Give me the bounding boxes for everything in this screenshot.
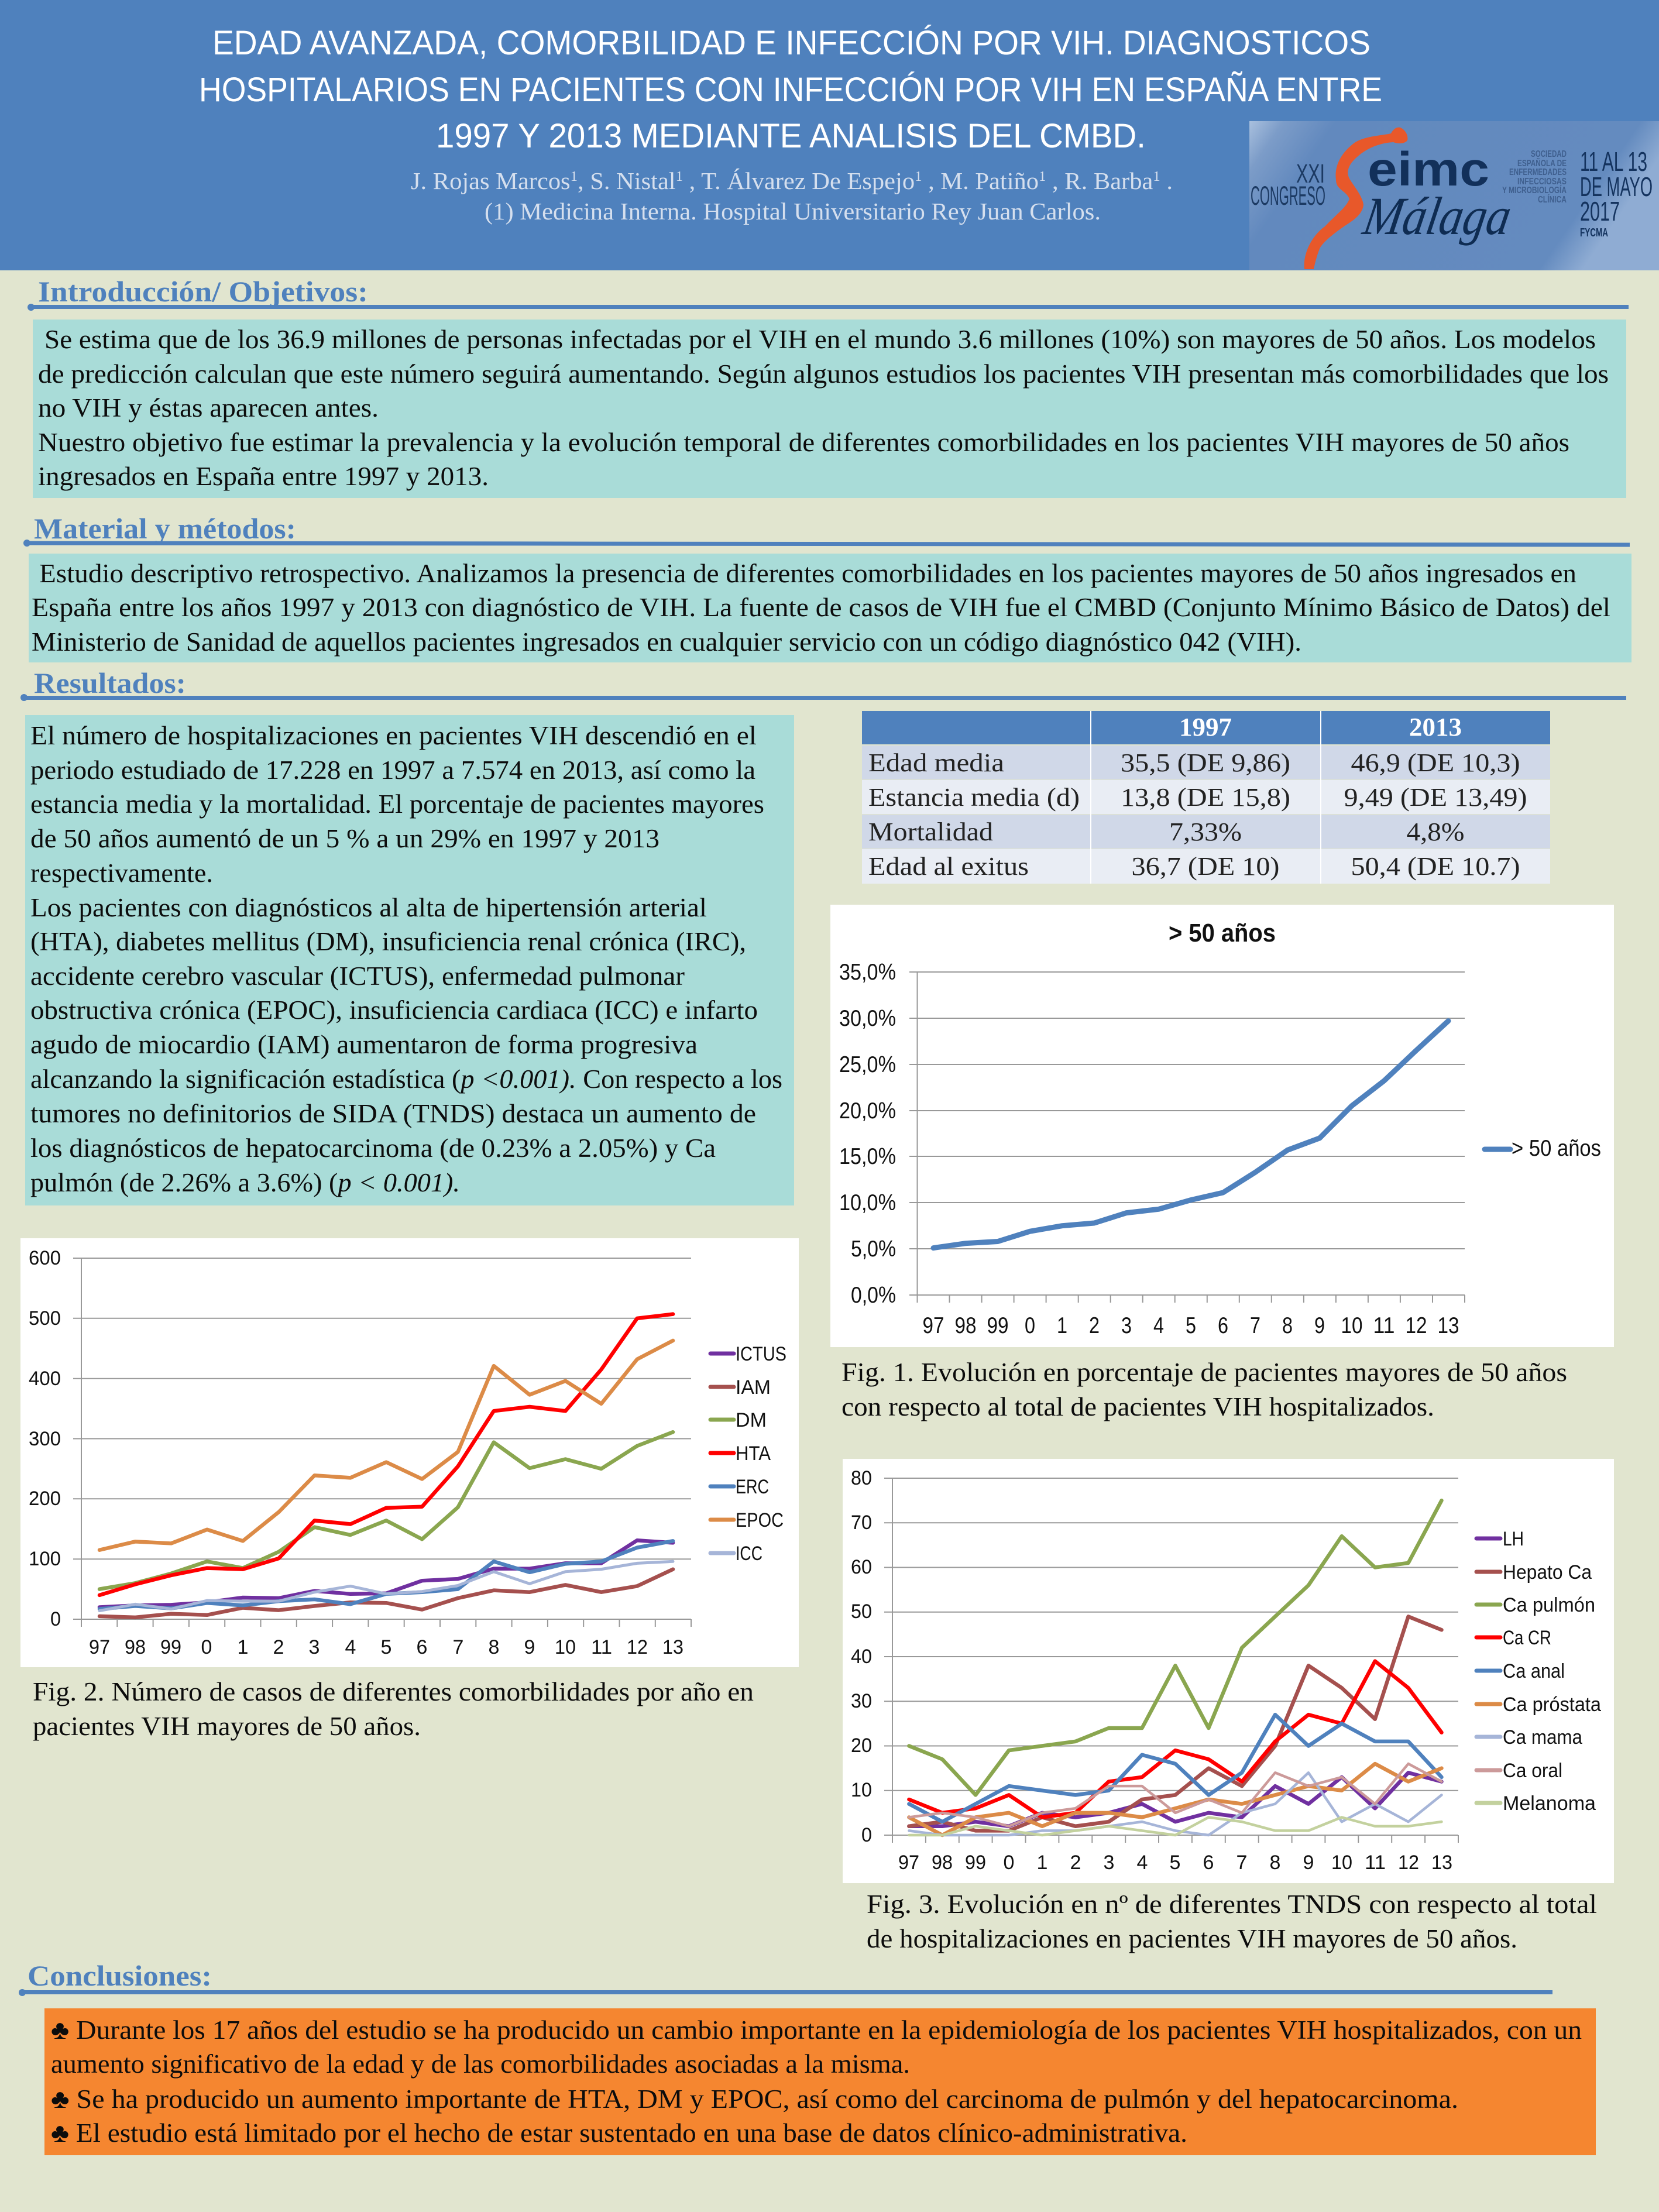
heading: Conclusiones: Conclusiones: xyxy=(28,1959,212,1992)
authors and affiliation: , R. Barba xyxy=(1046,167,1153,194)
chart: Fig. 3 TNDS: 20 xyxy=(851,1734,872,1757)
chart: Fig. 2 comorbilidades: 3 xyxy=(309,1636,320,1658)
caption: Fig. 1: con respecto al total de pacientes VIH hospitalizados. xyxy=(841,1392,1434,1421)
chart: Fig. 3 TNDS: 10 xyxy=(851,1779,872,1801)
title: HOSPITALARIOS EN PACIENTES CON INFECCIÓN POR VIH EN ESPAÑA ENTRE xyxy=(199,71,1382,109)
authors and affiliation: 1 xyxy=(1039,169,1046,184)
caption: Fig. 2: Fig. 2. Número de casos de diferentes comorbilidades por año en xyxy=(33,1677,754,1706)
congress logo: Málaga xyxy=(1358,187,1516,246)
chart: Fig. 1 > 50 años: 98 xyxy=(955,1313,976,1338)
chart: Fig. 2 comorbilidades: 200 xyxy=(29,1488,61,1510)
chart: Fig. 1 > 50 años: 0,0% xyxy=(851,1283,896,1308)
chart: Fig. 1 > 50 años: 97 xyxy=(922,1313,944,1338)
chart: Fig. 2 comorbilidades: 10 xyxy=(555,1636,576,1658)
congress logo: INFECCIOSAS xyxy=(1517,177,1567,187)
congress logo: ENFERMEDADES xyxy=(1509,167,1567,177)
chart: Fig. 1 > 50 años: 5 xyxy=(1186,1313,1196,1338)
congress logo: Y MICROBIOLOGÍA xyxy=(1502,184,1567,195)
authors and affiliation: , M. Patiño xyxy=(922,167,1039,194)
chart: Fig. 3 TNDS: 3 xyxy=(1104,1852,1114,1874)
chart: Fig. 1 > 50 años: 2 xyxy=(1089,1313,1100,1338)
table: summary 1997 vs 2013: Estancia media (d) xyxy=(868,783,1080,812)
congress logo: CONGRESO xyxy=(1251,181,1325,211)
authors and affiliation: 1 xyxy=(676,169,683,184)
panel: conclusiones: ♣ Se ha producido un aumento importante de HTA, DM y EPOC, así como del carcinoma de pulmón y del hepatocarcinoma. xyxy=(51,2084,1458,2114)
congress logo: XXI xyxy=(1296,159,1325,188)
table: summary 1997 vs 2013: 4,8% xyxy=(1407,818,1464,846)
chart: Fig. 3 TNDS: 4 xyxy=(1137,1852,1148,1874)
chart: Fig. 3 TNDS: 2 xyxy=(1070,1852,1081,1874)
panel: resultados text xyxy=(25,715,794,1205)
panel: introducción: de predicción calculan que este número seguirá aumentando. Según algunos estudios los pacientes VIH presentan más comorbilidades que los xyxy=(38,359,1609,389)
chart: Fig. 2 comorbilidades: 400 xyxy=(29,1368,61,1390)
chart: Fig. 3 TNDS: 12 xyxy=(1398,1852,1419,1874)
chart: Fig. 1 > 50 años: 13 xyxy=(1437,1313,1459,1338)
chart: Fig. 1 > 50 años: 4 xyxy=(1153,1313,1164,1338)
panel: resultados text: El número de hospitalizaciones en pacientes VIH descendió en el xyxy=(30,721,757,750)
chart: Fig. 3 TNDS: 30 xyxy=(851,1690,872,1712)
panel: conclusiones: aumento significativo de la edad y de las comorbilidades asociadas a la misma. xyxy=(51,2049,910,2079)
panel: introducción: Nuestro objetivo fue estimar la prevalencia y la evolución temporal de diferentes comorbilidades en los pacientes VIH mayores de 50 años xyxy=(38,428,1569,457)
chart: Fig. 1 > 50 años: 8 xyxy=(1282,1313,1293,1338)
table: summary 1997 vs 2013: 7,33% xyxy=(1169,818,1242,846)
chart: Fig. 3 TNDS: 7 xyxy=(1236,1852,1247,1874)
chart: Fig. 3 TNDS: 50 xyxy=(851,1600,872,1623)
chart: Fig. 2 comorbilidades: 0 xyxy=(50,1608,61,1630)
chart: Fig. 2 comorbilidades: 12 xyxy=(627,1636,648,1658)
congress logo: ESPAÑOLA DE xyxy=(1517,157,1567,169)
congress logo xyxy=(1249,121,1659,270)
chart: Fig. 1 > 50 años: 25,0% xyxy=(839,1052,896,1077)
authors and affiliation: 1 xyxy=(571,169,578,184)
chart: Fig. 3 TNDS: 11 xyxy=(1365,1852,1386,1874)
panel: introducción xyxy=(33,320,1626,498)
congress logo: FYCMA xyxy=(1580,226,1608,239)
authors and affiliation: . xyxy=(1160,167,1173,194)
icon: orange swoosh xyxy=(1304,128,1407,269)
table: summary 1997 vs 2013: Edad al exitus xyxy=(868,852,1029,881)
panel: introducción: no VIH y éstas aparecen antes. xyxy=(38,393,379,423)
chart: Fig. 1 > 50 años: > 50 años xyxy=(1512,1136,1601,1161)
chart: Fig. 1 > 50 años: 5,0% xyxy=(851,1236,896,1262)
table: summary 1997 vs 2013: 9,49 (DE 13,49) xyxy=(1344,783,1527,812)
panel: resultados text: tumores no definitorios de SIDA (TNDS) destaca un aumento de xyxy=(30,1099,756,1128)
panel: resultados text: periodo estudiado de 17.228 en 1997 a 7.574 en 2013, así como la xyxy=(30,755,755,785)
header banner xyxy=(0,0,1659,270)
legend: Fig. 3: Ca pulmón xyxy=(1503,1594,1595,1616)
panel: resultados text: estancia media y la mortalidad. El porcentaje de pacientes mayores xyxy=(30,789,764,819)
caption: Fig. 1 xyxy=(841,1358,1567,1421)
panel: material y métodos xyxy=(29,554,1631,662)
chart: Fig. 2 comorbilidades: 99 xyxy=(160,1636,181,1658)
chart: Fig. 2 comorbilidades: 1 xyxy=(238,1636,248,1658)
congress logo: 2017 xyxy=(1580,196,1620,226)
table: summary 1997 vs 2013: Edad media xyxy=(868,748,1004,777)
chart: Fig. 2 comorbilidades: 500 xyxy=(29,1307,61,1330)
congress logo: CLÍNICA xyxy=(1538,194,1567,205)
authors and affiliation: , T. Álvarez De Espejo xyxy=(683,167,915,194)
caption: Fig. 3: Fig. 3. Evolución en nº de diferentes TNDS con respecto al total xyxy=(867,1890,1597,1919)
legend: Fig. 3: Ca mama xyxy=(1503,1726,1582,1749)
panel: resultados text: accidente cerebro vascular (ICTUS), enfermedad pulmonar xyxy=(30,961,685,991)
authors and affiliation: 1 xyxy=(915,169,922,184)
title xyxy=(199,24,1382,155)
table: summary 1997 vs 2013: 36,7 (DE 10) xyxy=(1132,852,1279,881)
chart: Fig. 3 TNDS: 70 xyxy=(851,1512,872,1534)
table: summary 1997 vs 2013: 35,5 (DE 9,86) xyxy=(1121,748,1290,777)
panel: introducción: ingresados en España entre 1997 y 2013. xyxy=(38,462,489,491)
chart: Fig. 3 TNDS: 80 xyxy=(851,1467,872,1489)
chart: Fig. 3 TNDS: 98 xyxy=(932,1852,953,1874)
legend: Fig. 2: ICC xyxy=(736,1543,762,1565)
caption: Fig. 1: Fig. 1. Evolución en porcentaje de pacientes mayores de 50 años xyxy=(841,1358,1567,1387)
legend: Fig. 3: Ca próstata xyxy=(1503,1694,1601,1716)
chart: Fig. 3 TNDS xyxy=(843,1459,1614,1883)
legend: Fig. 3: Ca anal xyxy=(1503,1660,1565,1682)
legend: Fig. 2: EPOC xyxy=(736,1509,784,1531)
panel: resultados text: agudo de miocardio (IAM) aumentaron de forma progresiva xyxy=(30,1030,698,1059)
chart: Fig. 1 > 50 años: 12 xyxy=(1406,1313,1427,1338)
panel: conclusiones: ♣ Durante los 17 años del estudio se ha producido un cambio importante en la epidemiología de los pacientes VIH hospitalizados, con un xyxy=(51,2015,1582,2045)
chart: Fig. 2 comorbilidades: 4 xyxy=(345,1636,356,1658)
legend: Fig. 3: Ca CR xyxy=(1503,1627,1551,1649)
chart: Fig. 3 TNDS: 13 xyxy=(1431,1852,1452,1874)
chart: Fig. 2 comorbilidades: 9 xyxy=(524,1636,535,1658)
chart: Fig. 1 > 50 años xyxy=(830,905,1614,1347)
table: summary 1997 vs 2013 xyxy=(862,711,1550,884)
chart: Fig. 1 > 50 años: 30,0% xyxy=(839,1006,896,1031)
legend: Fig. 2 xyxy=(710,1343,786,1565)
chart: Fig. 1 > 50 años: 20,0% xyxy=(839,1098,896,1124)
chart: Fig. 1 > 50 años: 10,0% xyxy=(839,1190,896,1215)
chart: Fig. 3 TNDS: 8 xyxy=(1270,1852,1280,1874)
chart: Fig. 3 TNDS: 0 xyxy=(861,1824,872,1846)
chart: Fig. 1 > 50 años: 6 xyxy=(1218,1313,1228,1338)
legend: Fig. 3: LH xyxy=(1503,1528,1524,1550)
panel: resultados text: Los pacientes con diagnósticos al alta de hipertensión arterial xyxy=(30,893,707,922)
chart: Fig. 1 > 50 años: 10 xyxy=(1341,1313,1362,1338)
chart: Fig. 3 TNDS: 9 xyxy=(1303,1852,1314,1874)
panel: material y métodos: España entre los años 1997 y 2013 con diagnóstico de VIH. La fuente de casos de VIH fue el CMBD (Conjunto Mínimo Básico de Datos) del xyxy=(32,593,1610,622)
chart: Fig. 3 TNDS: 1 xyxy=(1037,1852,1047,1874)
chart: Fig. 1 > 50 años: 0 xyxy=(1025,1313,1035,1338)
legend: Fig. 3: Melanoma xyxy=(1503,1792,1596,1815)
legend: Fig. 3: Hepato Ca xyxy=(1503,1561,1592,1584)
heading: Resultados xyxy=(20,667,1626,701)
panel: resultados text: alcanzando la significación estadística ( p <0.001). Con respecto a los xyxy=(30,1064,782,1094)
heading: Conclusiones xyxy=(19,1959,1552,1996)
chart: Fig. 1 > 50 años: 3 xyxy=(1121,1313,1132,1338)
chart: Fig. 1 > 50 años: 99 xyxy=(987,1313,1009,1338)
legend: Fig. 2: HTA xyxy=(736,1442,771,1465)
chart: Fig. 3 TNDS: 0 xyxy=(1004,1852,1014,1874)
panel: resultados text: (HTA), diabetes mellitus (DM), insuficiencia renal crónica (IRC), xyxy=(30,927,746,956)
panel: resultados text: pulmón (de 2.26% a 3.6%) ( p < 0.001). xyxy=(30,1168,460,1197)
authors and affiliation: 1 xyxy=(1153,169,1160,184)
legend: Fig. 3 xyxy=(1476,1528,1601,1815)
heading: Introducción / Objetivos: Introducción/ Objetivos: xyxy=(38,275,368,308)
chart: Fig. 3 TNDS: 40 xyxy=(851,1646,872,1668)
chart: Fig. 2 comorbilidades: 97 xyxy=(89,1636,110,1658)
heading: Material y métodos xyxy=(23,512,1630,547)
authors and affiliation: J. Rojas Marcos xyxy=(411,167,565,194)
chart: Fig. 1 > 50 años: > 50 años xyxy=(1169,919,1276,947)
title: 1997 Y 2013 MEDIANTE ANALISIS DEL CMBD. xyxy=(436,117,1146,155)
table: summary 1997 vs 2013: 13,8 (DE 15,8) xyxy=(1121,783,1290,812)
panel: introducción: Se estima que de los 36.9 millones de personas infectadas por el VIH en el mundo 3.6 millones (10%) son mayores de 50 años. Los modelos xyxy=(44,325,1596,354)
panel: material y métodos: Ministerio de Sanidad de aquellos pacientes ingresados en cualquier servicio con un código diagnóstico 042 (VIH). xyxy=(32,627,1301,657)
table: summary 1997 vs 2013: Mortalidad xyxy=(868,818,993,846)
chart: Fig. 3 TNDS: 60 xyxy=(851,1556,872,1578)
panel: resultados text: obstructiva crónica (EPOC), insuficiencia cardiaca (ICC) e infarto xyxy=(30,995,758,1025)
authors and affiliation: , S. Nistal xyxy=(578,167,676,194)
chart: Fig. 2 comorbilidades: 6 xyxy=(417,1636,427,1658)
panel: resultados text: de 50 años aumentó de un 5 % a un 29% en 1997 y 2013 xyxy=(30,824,660,853)
chart: Fig. 2 comorbilidades: 7 xyxy=(453,1636,463,1658)
chart: Fig. 3 TNDS: 99 xyxy=(965,1852,986,1874)
chart: Fig. 2 comorbilidades: 11 xyxy=(591,1636,612,1658)
chart: Fig. 1 > 50 años: 7 xyxy=(1250,1313,1260,1338)
chart: Fig. 3 TNDS: 97 xyxy=(898,1852,919,1874)
legend: Fig. 2: ERC xyxy=(736,1476,769,1498)
heading: Material y métodos: Material y métodos: xyxy=(34,512,296,545)
chart: Fig. 3 TNDS: 6 xyxy=(1203,1852,1214,1874)
panel: conclusiones xyxy=(44,2008,1596,2155)
chart: Fig. 2 comorbilidades: 600 xyxy=(29,1247,61,1269)
legend: Fig. 2: DM xyxy=(736,1409,767,1431)
legend: Fig. 2: ICTUS xyxy=(736,1343,786,1365)
chart: Fig. 2 comorbilidades: 5 xyxy=(381,1636,391,1658)
chart: Fig. 1 > 50 años: 11 xyxy=(1373,1313,1395,1338)
chart: Fig. 1 > 50 años: 35,0% xyxy=(839,960,896,985)
legend: Fig. 3: Ca oral xyxy=(1503,1760,1562,1782)
chart: Fig. 2 comorbilidades: 300 xyxy=(29,1428,61,1450)
chart: Fig. 1 > 50 años: 15,0% xyxy=(839,1144,896,1169)
chart: Fig. 3 TNDS: 5 xyxy=(1170,1852,1180,1874)
caption: Fig. 3: de hospitalizaciones en pacientes VIH mayores de 50 años. xyxy=(867,1924,1517,1953)
panel: resultados text: respectivamente. xyxy=(30,858,213,888)
legend: Fig. 2: IAM xyxy=(736,1376,771,1399)
congress logo: eimc xyxy=(1368,143,1489,196)
chart: Fig. 2 comorbilidades xyxy=(20,1238,799,1667)
title: EDAD AVANZADA, COMORBILIDAD E INFECCIÓN POR VIH. DIAGNOSTICOS xyxy=(212,24,1371,62)
table: summary 1997 vs 2013: 2013 xyxy=(1409,713,1462,741)
caption: Fig. 2 xyxy=(33,1677,754,1741)
caption: Fig. 3 xyxy=(867,1890,1597,1953)
chart: Fig. 2 comorbilidades: 100 xyxy=(29,1548,61,1570)
chart: Fig. 2 comorbilidades: 98 xyxy=(125,1636,146,1658)
chart: Fig. 1 > 50 años: 9 xyxy=(1314,1313,1325,1338)
panel: conclusiones: ♣ El estudio está limitado por el hecho de estar sustentado en una base de datos clínico-administrativa. xyxy=(51,2118,1187,2148)
chart: Fig. 2 comorbilidades: 0 xyxy=(201,1636,212,1658)
heading: Introducción / Objetivos xyxy=(28,275,1629,311)
panel: material y métodos: Estudio descriptivo retrospectivo. Analizamos la presencia de diferentes comorbilidades en los pacientes mayores de 50 años ingresados en xyxy=(39,559,1576,588)
caption: Fig. 2: pacientes VIH mayores de 50 años. xyxy=(33,1712,421,1741)
table: summary 1997 vs 2013: 1997 xyxy=(1179,713,1232,741)
table: summary 1997 vs 2013: 46,9 (DE 10,3) xyxy=(1351,748,1520,777)
chart: Fig. 2 comorbilidades: 2 xyxy=(273,1636,284,1658)
congress logo: SOCIEDAD xyxy=(1531,149,1567,159)
chart: Fig. 1 > 50 años: 1 xyxy=(1057,1313,1067,1338)
chart: Fig. 2 comorbilidades: 13 xyxy=(662,1636,683,1658)
authors and affiliation xyxy=(411,167,1173,225)
table: summary 1997 vs 2013: 50,4 (DE 10.7) xyxy=(1351,852,1520,881)
authors and affiliation: (1) Medicina Interna. Hospital Universitario Rey Juan Carlos. xyxy=(485,198,1101,225)
heading: Resultados: Resultados: xyxy=(34,667,186,699)
panel: resultados text: los diagnósticos de hepatocarcinoma (de 0.23% a 2.05%) y Ca xyxy=(30,1134,716,1163)
chart: Fig. 2 comorbilidades: 8 xyxy=(489,1636,499,1658)
chart: Fig. 3 TNDS: 10 xyxy=(1331,1852,1352,1874)
